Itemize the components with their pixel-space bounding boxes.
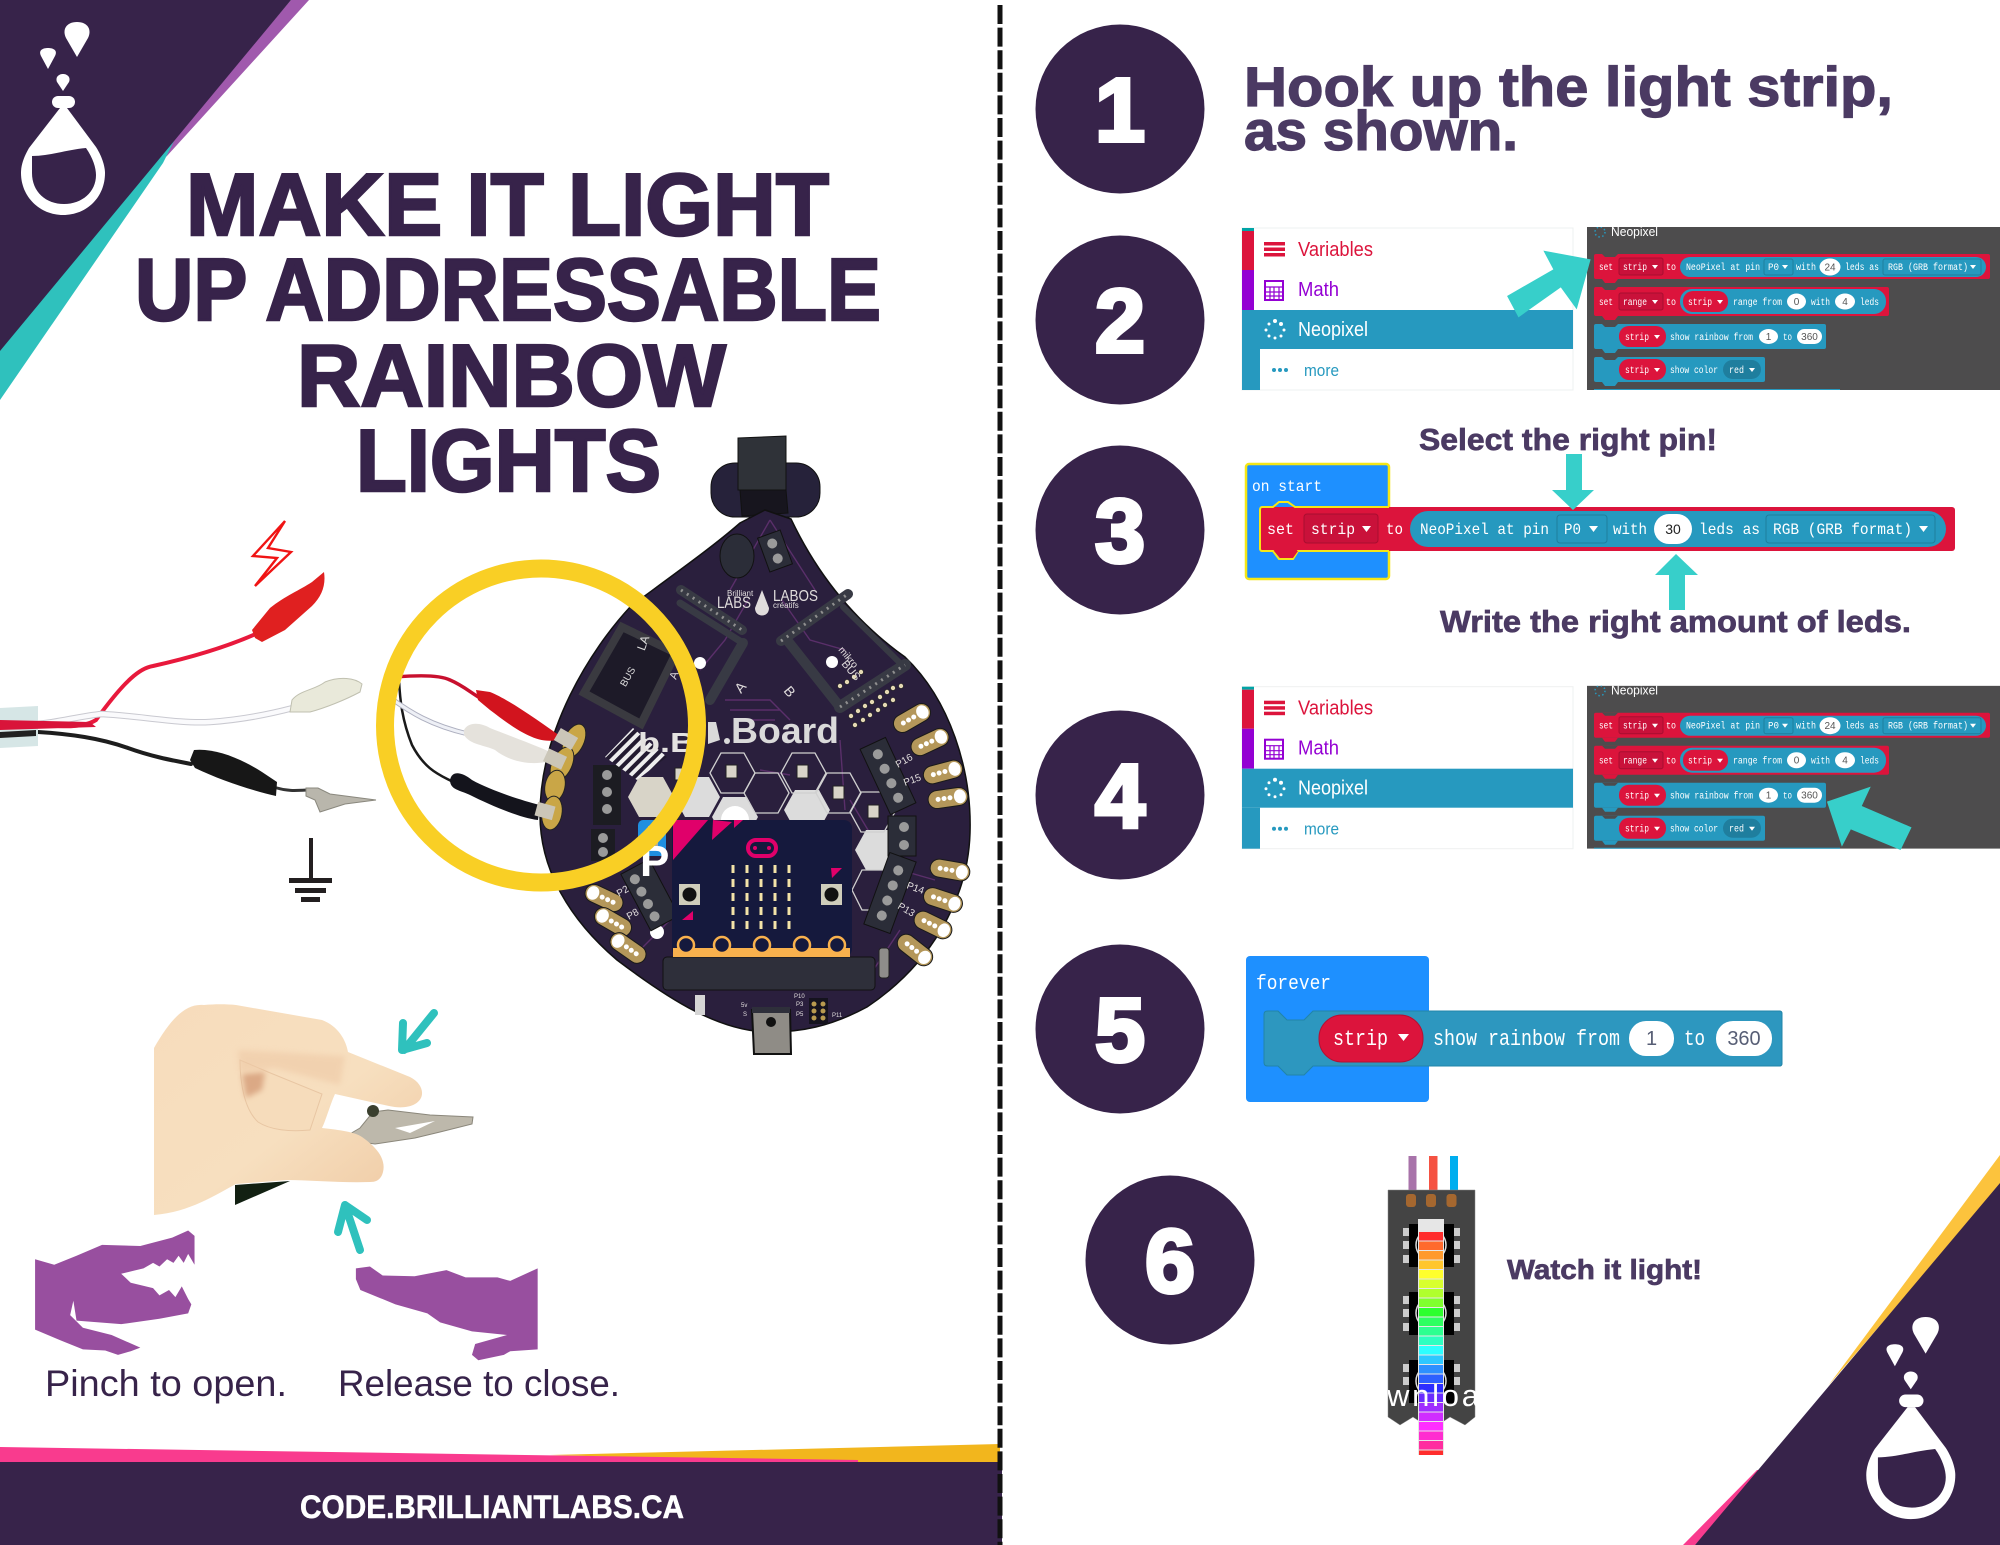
dashed divider	[998, 5, 1002, 1545]
show color block: show color	[1670, 824, 1718, 836]
b.Board circuit board	[540, 436, 971, 1054]
set strip block: 24	[1824, 721, 1836, 732]
set strip block: with	[1613, 521, 1647, 539]
set range block: set	[1599, 298, 1613, 309]
step 4 toolbox: Variables	[1298, 698, 1373, 720]
set range block: strip	[1688, 297, 1712, 309]
set strip block: leds as	[1699, 521, 1760, 539]
metal alligator clip	[348, 1105, 473, 1144]
set strip block: P0	[1768, 722, 1779, 733]
set strip block: strip	[1623, 721, 1647, 733]
show rainbow block: strip	[1333, 1027, 1388, 1052]
step 2 toolbox: Math	[1298, 279, 1339, 301]
show rainbow block: to	[1783, 333, 1792, 344]
show rainbow block: to	[1783, 792, 1792, 803]
wires	[1408, 1156, 1458, 1190]
rainbow stripe	[1418, 1219, 1444, 1455]
hexagon outlines and LEDs	[675, 753, 895, 910]
inset wires	[392, 676, 480, 782]
set strip block: P0	[1564, 521, 1581, 539]
step 3 number	[1036, 446, 1204, 614]
LED matrix	[732, 865, 790, 929]
board head and connector	[711, 436, 820, 517]
step 4 block palette	[1587, 683, 2000, 850]
step 6 number	[1086, 1176, 1254, 1344]
arrow: pin	[1552, 454, 1594, 510]
board silkscreen labels: Brilliant	[727, 589, 754, 598]
icon: lightning bolt	[253, 521, 291, 586]
yellow highlight ring	[385, 568, 697, 882]
set range block: 4	[1842, 756, 1848, 767]
header pin dots	[838, 670, 904, 728]
set strip block: 30	[1665, 521, 1681, 537]
step 2 number	[1036, 236, 1204, 404]
set strip block: set	[1599, 263, 1613, 274]
show color block	[1594, 816, 1765, 845]
inset: wires clipped onto pads	[392, 627, 696, 886]
set strip block: with	[1796, 721, 1816, 733]
set range block: leds	[1860, 756, 1879, 768]
step 3 on start block: on start	[1252, 478, 1322, 496]
caption: pinch: Pinch to open.	[45, 1363, 287, 1404]
watermark fragment: wnloa	[1386, 1378, 1480, 1413]
set range block: leds	[1860, 297, 1879, 309]
socket, striped block and blue part inside ring: LA	[634, 634, 652, 652]
crocodile: closed jaw	[356, 1267, 538, 1360]
show rainbow block: strip	[1625, 332, 1649, 344]
edge connector	[673, 937, 850, 957]
show rainbow block: show rainbow from	[1433, 1027, 1620, 1052]
board silkscreen labels: mikro	[836, 645, 860, 671]
photo: alligator wires	[0, 572, 376, 812]
set range block: 0	[1794, 297, 1800, 308]
board silkscreen labels: P5	[796, 1012, 804, 1018]
step 5 number: 5	[1095, 981, 1145, 1081]
step 1 heading	[1244, 55, 1893, 162]
set range block: with	[1811, 756, 1830, 768]
step 4 number	[1036, 710, 1204, 880]
set strip block: with	[1796, 262, 1816, 274]
step 4 toolbox: Math	[1298, 738, 1339, 760]
set strip block: leds as	[1845, 721, 1879, 733]
socket, striped block and blue part inside ring: P	[640, 837, 669, 886]
step 2 toolbox: Variables	[1298, 239, 1373, 261]
set range block: with	[1811, 297, 1830, 309]
mikroBUS sockets	[680, 590, 905, 707]
show rainbow block: 1	[1766, 332, 1772, 343]
set range block: set	[1599, 757, 1613, 768]
board silkscreen labels	[615, 588, 926, 1019]
set strip block: strip	[1311, 521, 1355, 539]
step 4 block palette: Neopixel	[1611, 683, 1658, 698]
step 5 forever block	[1246, 956, 1782, 1102]
show rainbow block: strip	[1625, 791, 1649, 803]
black clip sleeve	[235, 1181, 290, 1205]
inset clips	[450, 690, 578, 820]
show color block: red	[1729, 365, 1744, 377]
set strip block: set	[1599, 722, 1613, 733]
show color block: strip	[1625, 365, 1649, 377]
show color block: strip	[1625, 824, 1649, 836]
socket, striped block and blue part inside ring: BUS	[619, 665, 639, 689]
board silkscreen labels: B	[781, 683, 799, 700]
bottom-right corner banner	[1683, 1155, 2000, 1545]
step 1 heading: as shown.	[1244, 99, 1518, 162]
mounting holes	[650, 656, 838, 939]
set strip block: to	[1666, 722, 1676, 733]
illustration: hand pinching clip	[154, 1004, 473, 1215]
set strip block: leds as	[1845, 262, 1879, 274]
board silkscreen labels: P10	[794, 994, 805, 1000]
board silkscreen labels: P8	[625, 907, 641, 923]
step 2 block palette	[1587, 224, 2000, 391]
set strip block: RGB (GRB format)	[1888, 721, 1968, 733]
footer ribbon	[0, 1444, 1000, 1462]
set strip block: to	[1386, 521, 1403, 539]
socket, striped block and blue part inside ring: b.B	[638, 727, 696, 758]
gold pads under clips	[539, 720, 591, 831]
set range block: 4	[1842, 297, 1848, 308]
step 1 number: 1	[1095, 61, 1145, 161]
step 5 number	[1036, 944, 1204, 1114]
caption: release: Release to close.	[338, 1363, 620, 1404]
board silkscreen labels: A	[731, 678, 750, 696]
show rainbow block: 360	[1801, 332, 1818, 343]
show rainbow block	[1264, 1011, 1782, 1075]
step 3 on start block	[1246, 464, 1955, 579]
arrow: pinch down	[402, 1013, 434, 1050]
step 3 label: leds: Write the right amount of leds.	[1440, 604, 1911, 639]
top-left corner banner	[0, 0, 309, 400]
board silkscreen labels: P3	[796, 1002, 804, 1008]
title: LIGHTS	[356, 411, 661, 510]
set range block: range	[1623, 298, 1647, 309]
LED strip illustration	[1386, 1156, 1480, 1455]
set strip block	[1594, 254, 1990, 283]
set strip block	[1260, 502, 1955, 559]
set strip block: NeoPixel at pin	[1686, 721, 1760, 733]
title: MAKE IT LIGHT	[186, 155, 829, 254]
set strip block	[1594, 713, 1990, 742]
set strip block: strip	[1623, 262, 1647, 274]
step 2 toolbox: Neopixel	[1298, 319, 1368, 341]
logo: flask top-left	[21, 22, 105, 215]
set strip block: RGB (GRB format)	[1888, 262, 1968, 274]
LED chips	[1403, 1224, 1460, 1403]
board body	[540, 510, 970, 1032]
board silkscreen labels: LABOS	[773, 588, 818, 605]
show rainbow block: to	[1684, 1027, 1705, 1052]
board silkscreen labels: S	[743, 1012, 747, 1018]
show color block: show color	[1670, 365, 1718, 377]
set range block: range	[1623, 757, 1647, 768]
set strip block: P0	[1768, 263, 1779, 274]
buttons	[679, 868, 842, 920]
show rainbow block: show rainbow from	[1670, 791, 1753, 803]
board silkscreen labels: créatifs	[773, 601, 799, 610]
step 4 toolbox	[1242, 687, 1573, 849]
step 1 number	[1036, 24, 1204, 194]
logo: flask bottom-right	[1866, 1317, 1955, 1519]
show rainbow block	[1594, 783, 1826, 812]
board silkscreen labels: P16	[894, 752, 915, 771]
board silkscreen labels: P15	[902, 772, 923, 789]
crocodile: open jaw	[35, 1230, 195, 1355]
board silkscreen labels: BUS	[839, 658, 862, 683]
set range block: range from	[1733, 297, 1782, 309]
board silkscreen labels: P14	[905, 880, 926, 897]
board silkscreen labels: P11	[832, 1013, 843, 1019]
step 4 toolbox: Neopixel	[1298, 778, 1368, 800]
icon: ground symbol	[289, 838, 332, 902]
board silkscreen labels: P2	[615, 884, 631, 900]
step 2 block palette: Neopixel	[1611, 224, 1658, 239]
show rainbow block	[1594, 324, 1826, 353]
step 6 caption: Watch it light!	[1507, 1254, 1702, 1285]
hand shape	[154, 1004, 422, 1215]
title: RAINBOW	[297, 326, 726, 425]
show rainbow block: 1	[1646, 1028, 1657, 1050]
show color block: red	[1729, 824, 1744, 836]
board name: Board	[731, 710, 839, 751]
step 3 number: 3	[1095, 482, 1145, 582]
show rainbow block: 360	[1727, 1028, 1761, 1050]
set strip block: NeoPixel at pin	[1686, 262, 1760, 274]
step 2 toolbox	[1242, 228, 1573, 390]
micro:bit	[663, 820, 875, 990]
socket, striped block and blue part inside ring	[584, 627, 696, 886]
arrow: pinch up	[338, 1205, 367, 1250]
show color block	[1594, 357, 1765, 386]
screw terminal blocks	[591, 530, 916, 933]
arrow: leds	[1655, 554, 1698, 610]
step 2 toolbox: more	[1304, 361, 1339, 380]
title	[135, 155, 881, 510]
board silkscreen labels: A	[668, 669, 682, 681]
finger crease	[240, 1060, 322, 1131]
set range block	[1594, 287, 1889, 320]
set strip block: RGB (GRB format)	[1773, 521, 1912, 539]
set range block: strip	[1688, 756, 1712, 768]
show rainbow block: 360	[1801, 791, 1818, 802]
circuit traces	[640, 520, 935, 990]
board silkscreen labels: LABS	[717, 593, 751, 612]
step 4 toolbox: more	[1304, 820, 1339, 839]
set range block	[1594, 746, 1889, 779]
solder pads	[1406, 1194, 1456, 1207]
light hexagons	[628, 777, 900, 870]
flask mark	[755, 590, 769, 616]
show rainbow block: 1	[1766, 791, 1772, 802]
set range block: range from	[1733, 756, 1782, 768]
set range block: to	[1666, 757, 1676, 768]
gold alligator pads	[582, 700, 971, 969]
footer bar	[0, 1462, 1002, 1545]
set strip block: set	[1267, 521, 1294, 539]
set strip block: 24	[1824, 262, 1836, 274]
step 4 number: 4	[1095, 747, 1145, 847]
arrow: step 4	[1827, 787, 1912, 850]
show rainbow block: show rainbow from	[1670, 332, 1753, 344]
set strip block: NeoPixel at pin	[1420, 521, 1549, 539]
set strip block: to	[1666, 263, 1676, 274]
bottom connectors and switch	[695, 948, 889, 1054]
step 2 number: 2	[1095, 272, 1145, 372]
step 3 label: select pin: Select the right pin!	[1419, 422, 1717, 457]
board silkscreen labels: P13	[896, 901, 917, 920]
set range block: 0	[1794, 756, 1800, 767]
step 1 heading: Hook up the light strip,	[1244, 55, 1893, 118]
step 5 forever block: forever	[1256, 973, 1331, 996]
set range block: to	[1666, 298, 1676, 309]
title: UP ADDRESSABLE	[135, 240, 881, 339]
step 6 number: 6	[1145, 1212, 1195, 1312]
board silkscreen labels: 5v	[741, 1003, 747, 1009]
footer bar: CODE.BRILLIANTLABS.CA	[300, 1489, 684, 1525]
arrow: step 2	[1507, 251, 1591, 317]
